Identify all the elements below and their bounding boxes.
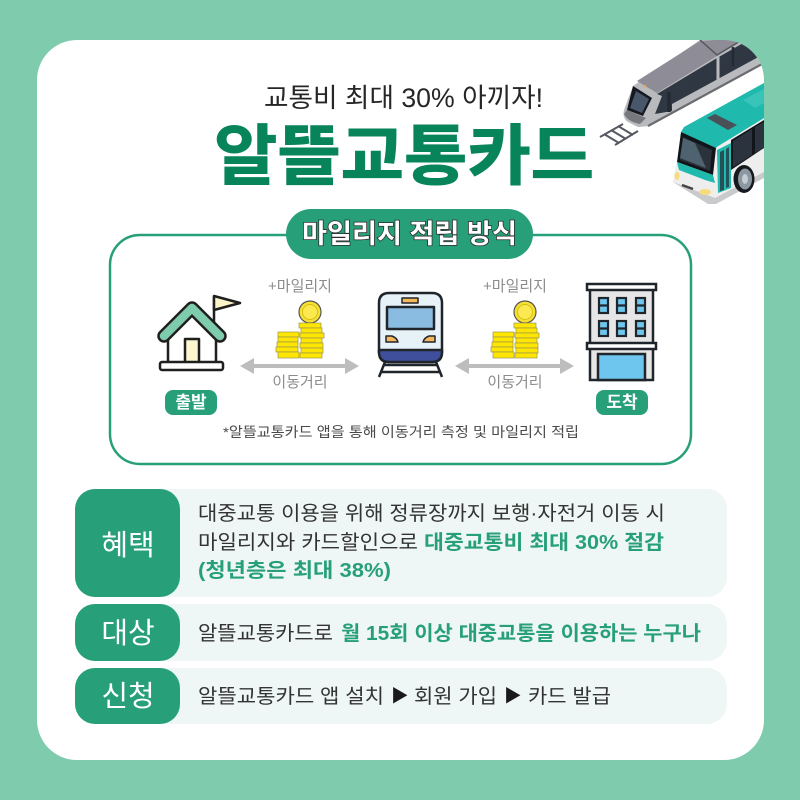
distance label right: 이동거리 (487, 374, 543, 391)
label: arrival: 도착 (606, 393, 638, 412)
icon: coins left (276, 301, 324, 358)
row: benefit: (청년층은 최대 38%) (198, 559, 391, 582)
row: apply: 알뜰교통카드 앱 설치 (198, 685, 384, 708)
icon: building (587, 284, 656, 380)
row: benefit: 대중교통비 최대 30% 절감 (424, 531, 664, 554)
row: target: 월 15회 이상 대중교통을 이용하는 누구나 (341, 622, 701, 645)
row: apply: 신청 (101, 681, 155, 713)
row: target: 대상 (101, 617, 155, 650)
row: benefit: 마일리지와 카드할인으로 (198, 531, 418, 554)
label: departure (165, 390, 217, 415)
label: arrival (596, 390, 648, 415)
icon: coins right (491, 301, 539, 358)
title: 알뜰교통카드 (214, 119, 594, 193)
label: departure: 출발 (175, 393, 207, 412)
row: target (75, 604, 727, 661)
arrow right (455, 358, 574, 374)
row: apply: 카드 발급 (528, 685, 611, 708)
arrow left (240, 358, 359, 374)
panel: mileage method (110, 235, 691, 464)
row: target: 알뜰교통카드로 (198, 622, 333, 645)
row: apply: ▶ (504, 686, 522, 706)
subtitle: 교통비 최대 30% 아끼자! (264, 83, 543, 113)
row: benefit: 대중교통 이용을 위해 정류장까지 보행·자전거 이동 시 (198, 502, 665, 525)
icon: train (379, 293, 442, 377)
footnote: *알뜰교통카드 앱을 통해 이동거리 측정 및 마일리지 적립 (223, 424, 579, 440)
panel heading pill (286, 209, 533, 259)
illustration: tram (600, 38, 764, 145)
row: apply: 회원 가입 (414, 685, 497, 708)
mileage label left: +마일리지 (268, 278, 332, 295)
row: benefit (75, 489, 727, 597)
row: apply (75, 668, 727, 724)
illustration: bus (673, 83, 764, 204)
panel heading pill: 마일리지 적립 방식 (302, 219, 517, 249)
row: benefit: 혜택 (101, 530, 155, 562)
distance label left: 이동거리 (272, 374, 328, 391)
mileage label right: +마일리지 (483, 278, 547, 295)
icon: house with flag (160, 296, 240, 370)
row: apply: ▶ (391, 686, 408, 706)
